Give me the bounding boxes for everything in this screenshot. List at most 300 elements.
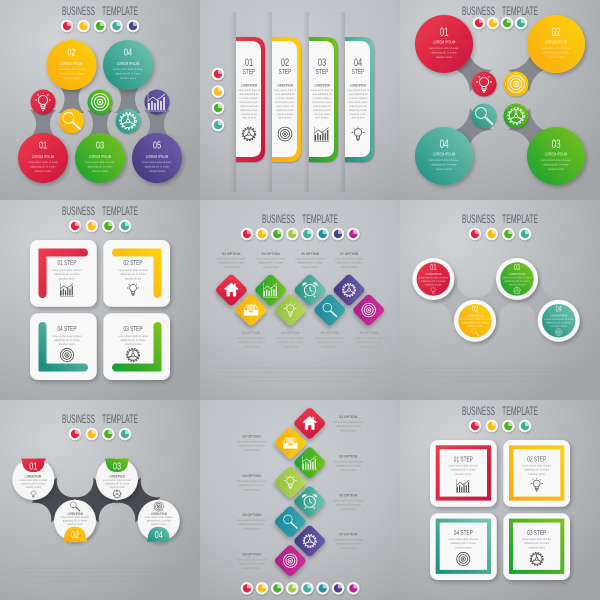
left option labels: 06 OPTION: [243, 513, 261, 517]
left option labels: Lorem ipsum dolor sit amet,: [237, 480, 267, 483]
footer text: Lorem ipsum dolor sit amet, consectetur adipiscing elit. In ornare interdum luctus. Lorem ipsum dolor sit amet, consectetur adipiscing elit. In ornare interdum: [19, 567, 181, 570]
icon: magnifier badge: [472, 104, 496, 128]
circle 02: interdum luctus: [548, 56, 565, 59]
step tab 03: STEP: [316, 69, 328, 76]
step tab 03: In ornare interdum: [313, 97, 331, 100]
circle 01: Lorem ipsum dolor sit amet,: [28, 161, 58, 164]
ring circle 03: Lorem ipsum dolor sit amet: [503, 276, 532, 280]
card 04: 04 STEP: [454, 528, 473, 537]
card 03: interdum luctus: [125, 343, 142, 346]
diamond 08 target: [273, 544, 307, 578]
card 03: interdum luctus: [529, 546, 546, 549]
icon: target badge: [504, 72, 528, 96]
diamond 03 chart: [254, 273, 288, 307]
card 02: interdum luctus: [529, 473, 546, 476]
circle 01: Lorem ipsum dolor sit amet,: [429, 47, 459, 50]
circle 03: 03: [552, 139, 561, 151]
panel: framed step cards: [400, 400, 600, 600]
card 02: 02 STEP: [527, 454, 546, 464]
connectors: [431, 277, 561, 323]
circle 01: interdum luctus: [436, 56, 453, 59]
card 04: 04 STEP: [58, 324, 76, 333]
icon: bulb badge: [472, 72, 496, 96]
title: BUSINESS: [62, 414, 95, 426]
circle 02: adipiscing elit. In ornare: [59, 72, 85, 76]
left option labels: [237, 434, 267, 570]
step tab 04: LOREM IPSUM: [350, 83, 367, 88]
step tab 02: Lorem ipsum dolor sit: [274, 89, 296, 92]
footer text: Lorem ipsum dolor sit amet, consectetur adipiscing elit. In ornare interdum luctus.: [450, 380, 550, 383]
option labels bottom: 04 OPTION: [281, 331, 300, 335]
title: TEMPLATE: [102, 414, 138, 426]
step tab 02: In ornare interdum: [276, 97, 294, 100]
diamond 06 magnifier: [273, 505, 307, 539]
option labels top: interdum luctus: [302, 266, 319, 269]
circle 03: LOREM IPSUM: [109, 474, 126, 479]
footer text: Lorem ipsum dolor sit amet, consectetur adipiscing elit. In ornare interdum luctus.: [250, 380, 350, 383]
circle 04: interdum luctus: [120, 77, 137, 80]
card 03: Lorem ipsum dolor sit amet: [522, 538, 551, 541]
circle 02: Lorem ipsum dolor sit amet: [61, 516, 89, 519]
card 02: adipiscing elit. In ornare: [524, 468, 550, 472]
title: BUSINESS: [62, 6, 95, 18]
circle 02: [527, 15, 585, 73]
right option labels: 07 OPTION: [339, 532, 358, 536]
option labels bottom: [236, 331, 384, 348]
option labels bottom: Lorem ipsum dolor sit amet,: [354, 337, 384, 340]
option labels top: Lorem ipsum dolor sit amet,: [295, 258, 325, 260]
diamond 07 gear: [293, 524, 327, 558]
connectors: [30, 85, 170, 138]
step tab 03: dolor sit amet: [315, 116, 329, 120]
card 02: [103, 240, 170, 307]
option labels bottom: interdum luctus: [322, 346, 339, 348]
circle 03: adipiscing elit. In ornare: [105, 482, 130, 486]
option labels bottom: Lorem ipsum dolor sit amet,: [276, 337, 305, 340]
circle 02: LOREM IPSUM: [545, 39, 567, 45]
step tab 01: LOREM IPSUM: [241, 83, 258, 88]
footer text: Lorem ipsum dolor sit amet, consectetur adipiscing elit. In ornare interdum luctus. Lorem ipsum dolor sit amet, consectetur adipiscing elit. In ornare interdum: [219, 367, 381, 370]
left option labels: interdum luctus: [244, 567, 261, 570]
card 03: adipiscing elit. In ornare: [524, 542, 550, 545]
option labels top: interdum luctus: [223, 266, 240, 269]
left option labels: adipiscing elit. In ornare: [239, 562, 265, 566]
title: TEMPLATE: [502, 406, 538, 418]
step tab 01: dolor sit amet elit: [240, 105, 258, 108]
left option labels: Lorem ipsum dolor sit amet,: [237, 519, 267, 522]
panel: L-corner step cards: [0, 200, 200, 400]
step tab 02: [266, 12, 301, 192]
circle 02: 02: [67, 46, 76, 58]
card 02: Lorem ipsum dolor sit amet: [119, 269, 148, 272]
legend dots: [469, 420, 531, 432]
circle 04: interdum luctus: [151, 523, 167, 526]
card 01: 01 STEP: [454, 454, 473, 464]
option labels bottom: Lorem ipsum dolor sit amet,: [315, 337, 345, 340]
footer text: Lorem ipsum dolor sit amet, consectetur adipiscing elit. In ornare interdum luctus.: [50, 580, 150, 583]
left option labels: 02 OPTION: [243, 434, 261, 438]
circle 03: [527, 127, 585, 185]
diamond 03 chart: [293, 446, 327, 480]
step tab 01: luctus lorem ipsum: [239, 101, 259, 104]
ring circle 03: interdum luctus: [509, 284, 526, 286]
option labels top: Lorem ipsum dolor sit amet,: [334, 258, 364, 260]
circle 01: 01: [29, 460, 37, 472]
diamond 08 target: [352, 293, 386, 327]
icon: chart badge: [144, 90, 170, 114]
legend dots: [69, 220, 131, 232]
circle 02: 02: [71, 529, 79, 540]
option labels bottom: interdum luctus: [282, 346, 299, 348]
circle 02: [54, 500, 96, 542]
circle 03: interdum luctus: [92, 170, 109, 173]
right option labels: [334, 415, 363, 550]
option labels bottom: Lorem ipsum dolor sit amet,: [236, 337, 266, 340]
circle 05: interdum luctus: [149, 170, 166, 173]
diamond 02 mail: [234, 293, 268, 327]
circle 01: LOREM IPSUM: [26, 474, 42, 479]
circle 04: Lorem ipsum dolor sit amet,: [429, 159, 459, 162]
title: TEMPLATE: [302, 214, 338, 226]
circle 03: interdum luctus: [548, 168, 565, 171]
option labels top: interdum luctus: [263, 266, 280, 269]
circle 04: 04: [155, 529, 163, 540]
ring circle 02: adipiscing elit. In ornare: [462, 322, 488, 325]
footer text: Lorem ipsum dolor sit amet, consectetur adipiscing elit. In ornare interdum luctus. Lorem ipsum dolor sit amet, consectetur adipiscing elit. In ornare: [25, 576, 176, 579]
card 04: interdum luctus: [455, 546, 472, 549]
step tab 02: luctus lorem ipsum: [275, 101, 295, 104]
card 03: Lorem ipsum dolor sit amet: [119, 335, 148, 338]
circle 01: interdum luctus: [35, 170, 52, 173]
step tab 02: adipiscing ornare: [276, 109, 294, 112]
legend dots: [241, 582, 360, 595]
circle 03: adipiscing elit. In ornare: [87, 166, 113, 168]
step tab 03: [303, 12, 338, 192]
circle 04: adipiscing elit. In ornare: [115, 72, 141, 76]
step tab 04: luctus lorem ipsum: [348, 101, 368, 104]
card 02: adipiscing elit. In ornare: [120, 273, 146, 276]
circle 04: 04: [124, 46, 132, 58]
step tab 02: LOREM IPSUM: [277, 83, 294, 88]
card 01: [430, 440, 497, 507]
legend dots: [241, 228, 360, 240]
option labels top: adipiscing elit. In ornare: [297, 262, 323, 264]
step tab 01: STEP: [243, 69, 255, 76]
card 01: [30, 240, 97, 307]
title: BUSINESS: [462, 214, 495, 226]
card 04: adipiscing elit. In ornare: [451, 542, 477, 545]
circle 01: LOREM IPSUM: [433, 39, 455, 45]
icon: gear badge: [504, 104, 528, 128]
step tab 04: 04: [354, 57, 362, 68]
title: TEMPLATE: [502, 6, 538, 18]
ring circle 02: 02: [472, 306, 478, 314]
step tab 03: amet adipiscing elit: [312, 93, 332, 96]
circle 01: 01: [440, 27, 449, 39]
card 01: Lorem ipsum dolor sit amet: [449, 464, 478, 468]
circle 05: Lorem ipsum dolor sit amet,: [142, 161, 172, 164]
right option labels: interdum luctus: [340, 508, 357, 511]
panel: vertical diamonds options: [200, 400, 400, 600]
step tab 01: dolor sit amet: [242, 116, 256, 120]
ring circle 03: [496, 258, 538, 300]
circle 02: [46, 40, 96, 90]
card 01: adipiscing elit. In ornare: [451, 468, 477, 472]
footer text: Lorem ipsum dolor sit amet, consectetur adipiscing elit. In ornare interdum luctus. Lorem ipsum dolor sit amet, consectetur adipiscing elit. In ornare interdum: [20, 571, 180, 574]
option labels top: Lorem ipsum dolor sit amet,: [256, 258, 286, 260]
left option labels: interdum luctus: [244, 449, 261, 452]
step tab 03: Lorem ipsum dolor sit: [311, 89, 333, 92]
card 04: interdum luctus: [59, 343, 76, 346]
circle 03: [75, 133, 125, 183]
step tab 03: 03: [318, 57, 326, 68]
option labels top: interdum luctus: [341, 266, 358, 269]
option labels bottom: interdum luctus: [361, 346, 378, 348]
option labels top: 05 OPTION: [301, 252, 320, 256]
card 02: [503, 440, 570, 507]
ring circle 04: adipiscing elit. In ornare: [546, 322, 572, 325]
diamond 01 home: [293, 406, 327, 440]
circle 04: 04: [440, 139, 449, 151]
circle 02: 02: [552, 27, 561, 39]
option labels bottom: 02 OPTION: [242, 331, 261, 335]
option labels top: 07 OPTION: [340, 252, 359, 256]
title: BUSINESS: [462, 6, 495, 18]
icon: magnifier badge: [59, 108, 84, 134]
legend dots: [469, 228, 531, 240]
circle 04: adipiscing elit. In ornare: [431, 164, 457, 166]
diamond 06 magnifier: [313, 293, 347, 327]
step tab 04: interdum luctus: [350, 113, 367, 116]
card 03: [103, 313, 170, 380]
step tab 01: In ornare interdum: [240, 97, 258, 100]
legend dots: [69, 428, 131, 440]
step tab 01: interdum luctus: [241, 113, 258, 116]
step tab 01: amet adipiscing elit: [239, 93, 259, 96]
circle 03: 03: [96, 139, 104, 151]
option labels bottom: 08 OPTION: [360, 331, 378, 335]
ring circle 01: [412, 258, 454, 300]
ring circle 01: 01: [430, 264, 437, 272]
right option labels: Lorem ipsum dolor sit amet,: [334, 538, 363, 542]
right option labels: Lorem ipsum dolor sit amet,: [334, 421, 363, 424]
circle 02: adipiscing elit. In ornare: [63, 520, 88, 522]
circle 03: interdum luctus: [109, 486, 126, 489]
circle 01: adipiscing elit. In ornare: [431, 52, 457, 54]
step tab 02: dolor sit amet elit: [276, 105, 294, 108]
card 03: 03 STEP: [124, 324, 142, 333]
title: TEMPLATE: [102, 206, 138, 218]
step tab 03: interdum luctus: [314, 113, 331, 116]
icon: bulb badge: [30, 90, 56, 114]
circle 03: adipiscing elit. In ornare: [543, 164, 569, 166]
left option labels: interdum luctus: [244, 488, 261, 492]
card 04: adipiscing elit. In ornare: [54, 339, 80, 342]
ring circle 04: LOREM IPSUM: [550, 315, 567, 318]
option labels bottom: adipiscing elit. In ornare: [317, 341, 343, 344]
step tab 02: 02: [281, 57, 289, 68]
option labels top: [217, 252, 364, 269]
step tab 03: dolor sit amet elit: [313, 105, 331, 108]
right option labels: adipiscing elit. In ornare: [336, 504, 362, 506]
card 01: 01 STEP: [58, 258, 76, 267]
right option labels: 01 OPTION: [339, 415, 358, 419]
panel: horizontal diamonds options: [200, 200, 400, 400]
right option labels: interdum luctus: [340, 469, 357, 472]
footer text: Lorem ipsum dolor sit amet, consectetur adipiscing elit. In ornare interdum luctus. Lorem ipsum dolor sit amet, consectetur adipiscing elit. In ornare interdum: [420, 371, 580, 374]
circle 02: LOREM IPSUM: [60, 60, 83, 66]
step tab 02: dolor sit amet: [278, 116, 292, 120]
circle 03: LOREM IPSUM: [545, 151, 567, 157]
option labels top: Lorem ipsum dolor sit amet,: [217, 258, 246, 260]
circle 01: Lorem ipsum dolor sit amet: [19, 479, 48, 482]
circle 04: interdum luctus: [436, 168, 453, 171]
icon: gear badge: [116, 108, 140, 134]
right option labels: adipiscing elit. In ornare: [336, 542, 362, 546]
circle 01: 01: [39, 139, 47, 151]
step tab 03: adipiscing ornare: [313, 109, 331, 112]
ring circle 03: 03: [514, 264, 520, 272]
footer text: [419, 367, 581, 383]
title: TEMPLATE: [102, 6, 138, 18]
circle 04: [138, 500, 180, 542]
ring circle 03: adipiscing elit. In ornare: [504, 280, 530, 283]
circle 05: 05: [153, 139, 161, 151]
right option labels: interdum luctus: [340, 430, 357, 432]
step tab 03: LOREM IPSUM: [314, 83, 331, 88]
circle 03: Lorem ipsum dolor sit amet,: [541, 159, 571, 162]
circle 03: [96, 458, 138, 500]
circle 01: LOREM IPSUM: [32, 153, 54, 159]
ring circle 04: 04: [556, 306, 562, 314]
ring circle 04: interdum luctus: [551, 325, 568, 328]
legend dots: [473, 17, 527, 29]
ring circle 01: Lorem ipsum dolor sit amet: [419, 276, 448, 280]
circle 03: LOREM IPSUM: [89, 153, 111, 159]
step tab 04: [339, 12, 374, 192]
card 01: Lorem ipsum dolor sit amet: [53, 269, 82, 272]
step tab 01: 01: [245, 57, 253, 68]
card 02: interdum luctus: [125, 278, 142, 280]
right option labels: adipiscing elit. In ornare: [336, 464, 362, 468]
step tab 03: luctus lorem ipsum: [312, 101, 332, 104]
diamond 04 bulb: [273, 465, 307, 499]
step tab 04: adipiscing ornare: [349, 109, 367, 112]
circle 04: [103, 40, 153, 90]
left option labels: Lorem ipsum dolor sit amet,: [237, 558, 267, 562]
left option labels: 04 OPTION: [243, 474, 261, 478]
option labels top: adipiscing elit. In ornare: [336, 262, 362, 264]
right option labels: 03 OPTION: [339, 454, 358, 458]
card 04: Lorem ipsum dolor sit amet: [53, 335, 82, 338]
step tab 02: STEP: [279, 69, 291, 76]
ring circle 03: LOREM IPSUM: [509, 273, 525, 276]
card 01: adipiscing elit. In ornare: [54, 273, 80, 276]
ring circle 02: Lorem ipsum dolor sit amet: [461, 318, 490, 321]
circle 03: Lorem ipsum dolor sit amet,: [85, 161, 115, 164]
footer text: [219, 367, 381, 383]
step tab 04: In ornare interdum: [349, 97, 367, 100]
footer text: Lorem ipsum dolor sit amet, consectetur adipiscing elit. In ornare interdum luctus. Lorem ipsum dolor sit amet, consectetur adipiscing elit. In ornare: [425, 376, 576, 379]
circle 01: [18, 133, 68, 183]
ring circle 01: interdum luctus: [425, 284, 442, 286]
circle 02: Lorem ipsum dolor sit amet,: [57, 68, 87, 71]
circle 02: interdum luctus: [67, 523, 84, 526]
title: BUSINESS: [262, 214, 295, 226]
footer text: Lorem ipsum dolor sit amet, consectetur adipiscing elit. In ornare interdum luctus. Lorem ipsum dolor sit amet, consectetur adipiscing elit. In ornare: [225, 376, 376, 379]
ring circle 04: [538, 300, 580, 342]
right option labels: Lorem ipsum dolor sit amet,: [334, 500, 363, 502]
step tab 02: amet adipiscing elit: [275, 93, 295, 96]
card 04: [430, 513, 497, 580]
panel: five connected circles: [0, 0, 200, 200]
circle 01: interdum luctus: [26, 486, 42, 489]
circle 02: adipiscing elit. In ornare: [543, 52, 569, 54]
title: BUSINESS: [62, 206, 95, 218]
footer text: [19, 567, 181, 583]
ring circle 01: adipiscing elit. In ornare: [421, 280, 447, 283]
step tab 04: dolor sit amet: [351, 116, 365, 120]
card 03: 03 STEP: [527, 528, 546, 537]
card 02: Lorem ipsum dolor sit amet: [522, 464, 551, 468]
circle 04: Lorem ipsum dolor sit amet,: [113, 68, 143, 71]
card 04: [30, 313, 97, 380]
circle 02: Lorem ipsum dolor sit amet,: [541, 47, 571, 50]
option labels bottom: adipiscing elit. In ornare: [278, 341, 304, 344]
option labels bottom: adipiscing elit. In ornare: [356, 341, 382, 344]
icon: target badge: [88, 90, 112, 114]
left option labels: adipiscing elit. In ornare: [239, 523, 265, 526]
footer text: Lorem ipsum dolor sit amet, consectetur adipiscing elit. In ornare interdum luctus. Lorem ipsum dolor sit amet, consectetur adipiscing elit. In ornare interdum: [419, 367, 581, 370]
circle 04: adipiscing elit. In ornare: [147, 520, 172, 522]
left option labels: adipiscing elit. In ornare: [239, 484, 265, 487]
panel: four ringed circles: [400, 200, 600, 400]
step tab 01: [230, 12, 265, 192]
ring circle 01: LOREM IPSUM: [425, 273, 442, 276]
left option labels: adipiscing elit. In ornare: [239, 444, 265, 448]
diamond 02 mail: [273, 426, 307, 460]
diamond 05 clock: [293, 485, 327, 519]
diamond 04 bulb: [273, 293, 307, 327]
title: TEMPLATE: [502, 214, 538, 226]
ring circle 02: interdum luctus: [467, 325, 484, 328]
right option labels: 05 OPTION: [339, 494, 358, 498]
right option labels: adipiscing elit. In ornare: [336, 425, 362, 428]
circle 05: [132, 133, 182, 183]
panel: four corner circles: [400, 0, 600, 200]
step tab 02: interdum luctus: [277, 113, 294, 116]
left option labels: 08 OPTION: [243, 552, 261, 556]
card 03: adipiscing elit. In ornare: [120, 339, 146, 342]
diamond 05 clock: [293, 273, 327, 307]
circle 01: adipiscing elit. In ornare: [21, 482, 46, 486]
diamond 07 gear: [332, 273, 366, 307]
circle 02: LOREM IPSUM: [67, 512, 84, 516]
circle 04: [415, 127, 473, 185]
option labels top: adipiscing elit. In ornare: [219, 262, 245, 264]
circle 05: LOREM IPSUM: [146, 153, 168, 159]
ring circle 02: [454, 300, 496, 342]
option labels top: 01 OPTION: [222, 252, 241, 256]
title: BUSINESS: [462, 406, 495, 418]
diamond 01 home: [214, 273, 248, 307]
option labels top: adipiscing elit. In ornare: [258, 262, 284, 264]
card 04: Lorem ipsum dolor sit amet: [449, 538, 478, 541]
circle 01: [12, 458, 54, 500]
option labels bottom: interdum luctus: [243, 346, 260, 348]
card 01: interdum luctus: [455, 473, 472, 476]
circle 02: interdum luctus: [63, 77, 80, 80]
